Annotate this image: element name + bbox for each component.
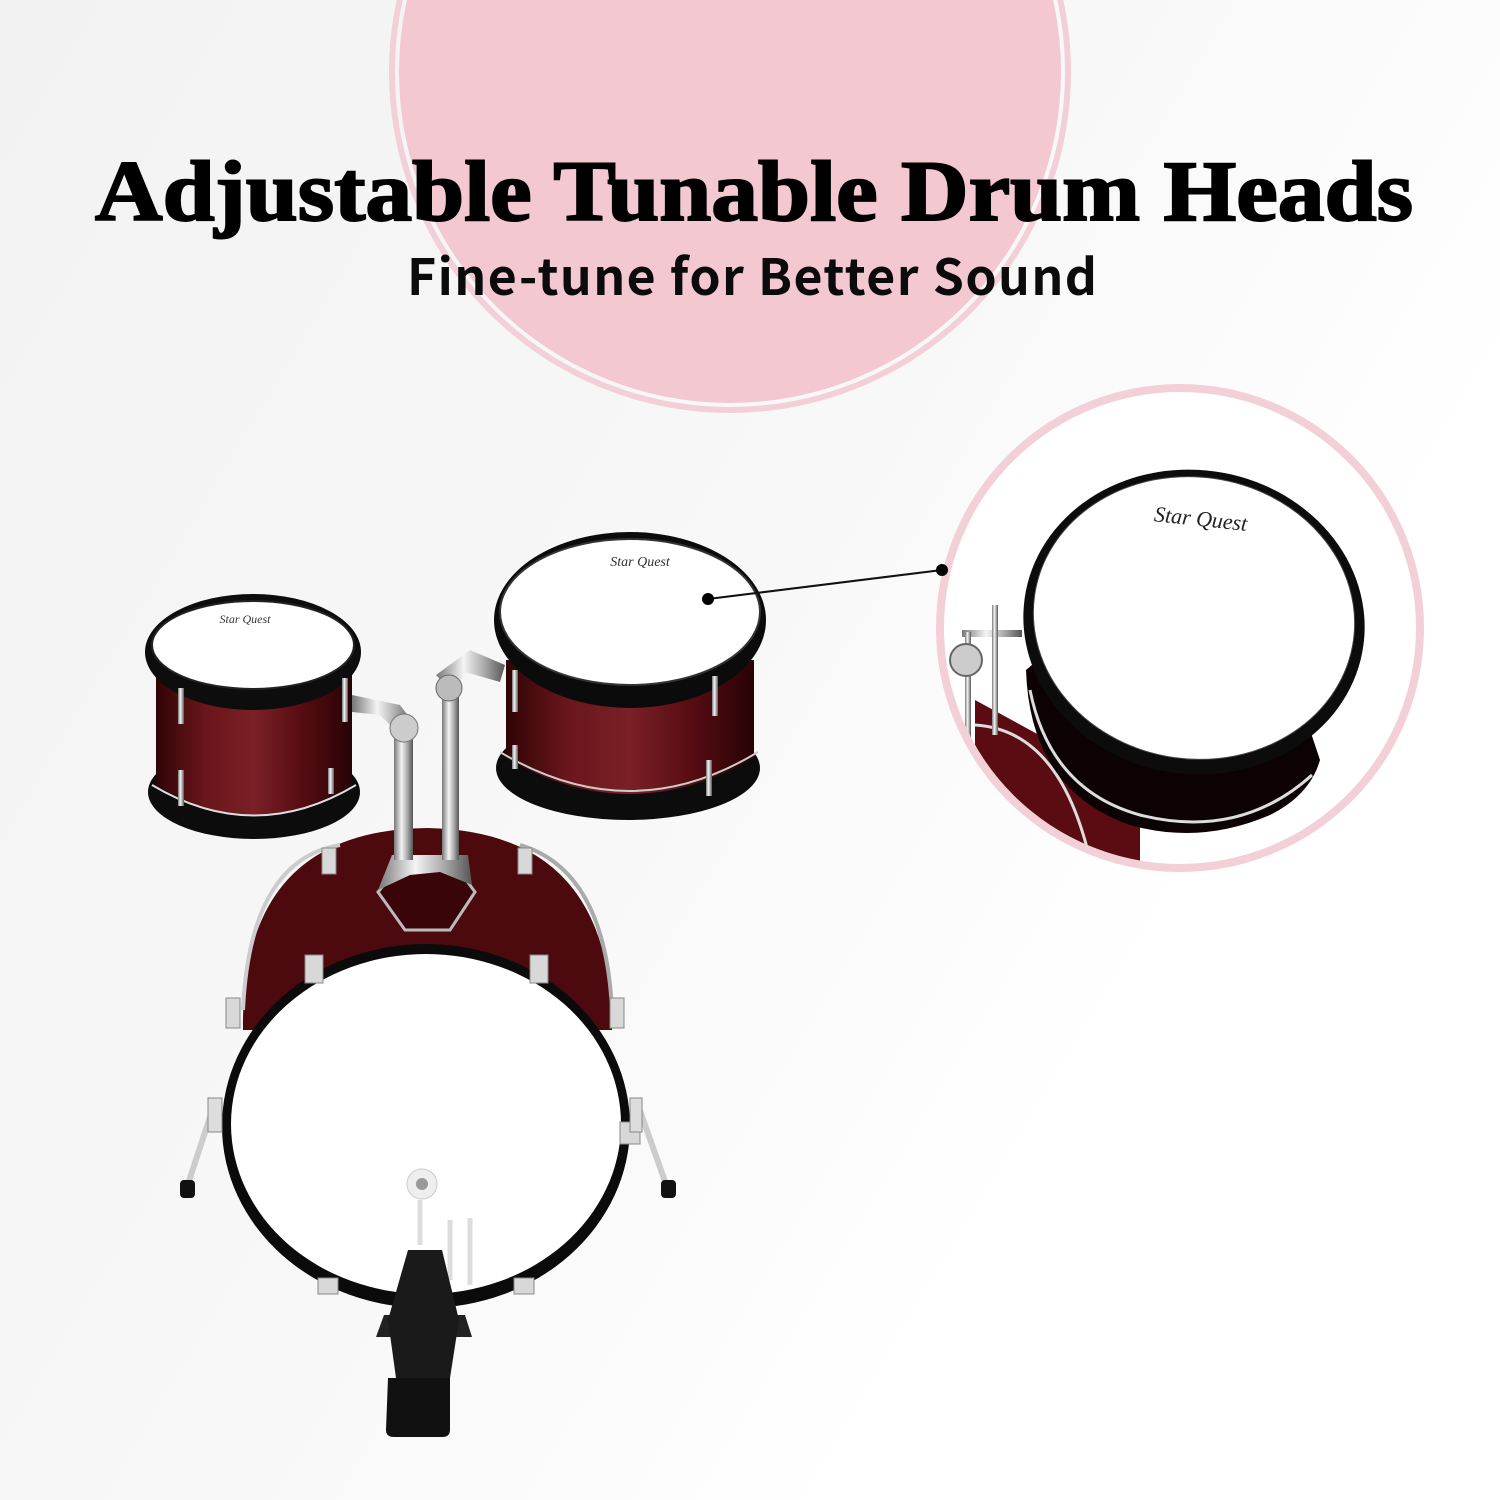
pink header circle — [392, 0, 1068, 410]
zoom callout circle — [940, 388, 1420, 870]
tension rods: left tom — [178, 678, 348, 806]
left leg — [180, 1098, 222, 1198]
bass drum — [222, 828, 640, 1308]
title: Adjustable Tunable Drum Heads — [95, 143, 1413, 239]
kick pedal — [376, 1169, 472, 1437]
right tom drum — [494, 532, 766, 820]
tom mount hardware — [352, 650, 505, 890]
callout leader line — [702, 564, 948, 605]
tension rods: right tom — [512, 670, 718, 796]
logo: zoomed drum: Star Quest — [1153, 501, 1249, 536]
right leg — [630, 1098, 676, 1198]
left tom drum — [145, 594, 361, 839]
logo: left tom: Star Quest — [220, 612, 271, 626]
bass drum lugs — [226, 848, 640, 1294]
logo: right tom: Star Quest — [610, 555, 671, 570]
subtitle: Fine-tune for Better Sound — [407, 238, 1097, 310]
